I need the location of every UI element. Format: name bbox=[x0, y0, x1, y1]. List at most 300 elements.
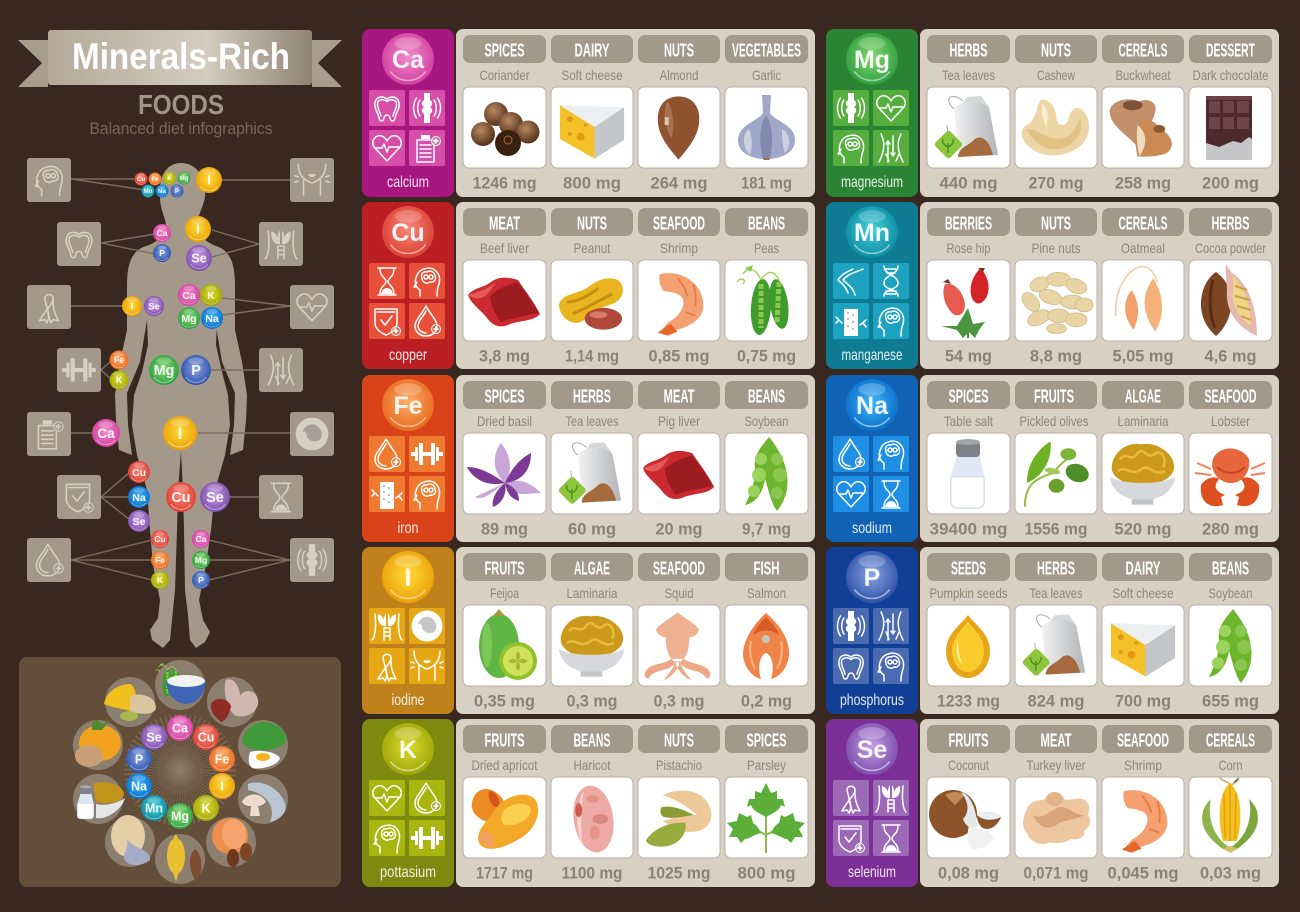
element spheres on body: Fe bbox=[114, 355, 124, 365]
element spheres on body: Ca bbox=[97, 426, 115, 441]
element ball Se bbox=[846, 723, 898, 775]
cell: Tea leaves: HERBS bbox=[950, 40, 988, 60]
cell: Pine nuts: NUTS bbox=[1041, 214, 1071, 234]
cell: Soybean: BEANS bbox=[1212, 558, 1249, 578]
card: manganese foods bbox=[920, 202, 1279, 369]
wheel element spheres: Se bbox=[146, 730, 162, 744]
icons bbox=[369, 608, 445, 684]
cell: Peas: 0,75 mg bbox=[737, 346, 796, 366]
cell: Oatmeal: CEREALS bbox=[1118, 214, 1168, 234]
element ball Cu bbox=[382, 206, 434, 258]
icons bbox=[369, 263, 445, 339]
cell: Oatmeal: Oatmeal bbox=[1121, 240, 1165, 256]
cell: Pumpkin seeds: SEEDS bbox=[951, 558, 986, 578]
panel: selenium bbox=[826, 719, 918, 887]
heading: FOODS: FOODS bbox=[138, 89, 224, 120]
cell: Pine nuts: Pine nuts bbox=[1032, 240, 1080, 256]
cell: Corn: 0,03 mg bbox=[1200, 864, 1261, 882]
element spheres on body: Fe bbox=[151, 176, 159, 183]
cell: Soybean: Soybean bbox=[1208, 585, 1252, 601]
panel: phosphorus bbox=[826, 547, 918, 714]
panel: manganese bbox=[826, 202, 918, 369]
cell: Cocoa powder: 4,6 mg bbox=[1204, 346, 1256, 366]
cell: Tea leaves: HERBS bbox=[1037, 558, 1075, 578]
element spheres on body: Fe bbox=[155, 555, 165, 565]
cell: Peanut bbox=[551, 208, 633, 366]
icons bbox=[833, 90, 909, 166]
name: selenium bbox=[848, 864, 896, 881]
connector lines bbox=[71, 179, 290, 580]
ribbon right tail bbox=[312, 40, 342, 87]
cell: Dried basil: 89 mg bbox=[481, 520, 528, 538]
element spheres on body: Ca bbox=[156, 228, 168, 238]
cell: Dark chocolate bbox=[1189, 35, 1272, 192]
cell: Shrimp: Shrimp bbox=[1124, 757, 1162, 773]
wheel background bbox=[19, 657, 341, 887]
cell: Haricot: BEANS bbox=[574, 730, 610, 750]
cell: Dried apricot: 1717 mg bbox=[476, 864, 533, 882]
icon tile: hourglass bbox=[259, 475, 303, 519]
icons bbox=[833, 608, 909, 684]
cell: Beef liver: MEAT bbox=[489, 214, 520, 234]
cell: Pine nuts bbox=[1015, 208, 1097, 366]
element spheres on body: I bbox=[207, 173, 211, 187]
icon tile: vessel bbox=[259, 348, 303, 392]
food circle: wheat and almond bbox=[155, 834, 205, 884]
panel: calcium bbox=[362, 29, 454, 197]
subtitle: Balanced diet infographics bbox=[90, 119, 272, 138]
cell: Soft cheese bbox=[551, 35, 633, 192]
cell: Pickled olives: 1556 mg bbox=[1024, 520, 1088, 538]
cell: Soybean: 655 mg bbox=[1202, 692, 1259, 710]
cell: Soybean: Soybean bbox=[744, 413, 788, 429]
panel: iron bbox=[362, 375, 454, 542]
cell: Almond: Almond bbox=[660, 67, 698, 83]
cell: Feijoa: 0,35 mg bbox=[474, 692, 535, 710]
cell: Dark chocolate: 200 mg bbox=[1202, 174, 1259, 192]
name: iodine bbox=[392, 692, 425, 709]
cell: Laminaria: 0,3 mg bbox=[566, 692, 618, 710]
panel: potassium bbox=[362, 719, 454, 887]
element ball K: K bbox=[399, 736, 417, 764]
cell: Squid: Squid bbox=[664, 585, 694, 601]
food circle: salt and algae bbox=[73, 774, 125, 824]
cell: Haricot: 1100 mg bbox=[562, 864, 622, 882]
cell: Beef liver: Beef liver bbox=[480, 240, 529, 256]
cell: Turkey liver: MEAT bbox=[1040, 730, 1072, 750]
cell: Coriander bbox=[463, 35, 546, 192]
wheel centre burst bbox=[142, 732, 218, 808]
element spheres on body: Cu bbox=[171, 490, 191, 506]
element ball Na bbox=[846, 379, 898, 431]
cell: Rose hip: BERRIES bbox=[945, 214, 992, 234]
cell: Garlic: 181 mg bbox=[741, 174, 792, 192]
element spheres on body: Mg bbox=[179, 175, 189, 182]
wheel element spheres: K bbox=[201, 801, 211, 815]
food circle: pumpkin and nut bbox=[73, 720, 123, 770]
card: magnesium foods bbox=[920, 29, 1279, 197]
icons bbox=[833, 780, 909, 856]
cell: Haricot: Haricot bbox=[574, 757, 611, 773]
cell: Shrimp bbox=[1102, 725, 1184, 882]
cell: Tea leaves: Tea leaves bbox=[1030, 585, 1082, 601]
cell: Lobster bbox=[1189, 381, 1272, 538]
cell: Pickled olives: Pickled olives bbox=[1020, 413, 1088, 429]
element spheres on body: I bbox=[131, 301, 134, 312]
element ball I bbox=[382, 551, 434, 603]
cell: Feijoa: FRUITS bbox=[484, 558, 524, 578]
wheel element spheres: P bbox=[135, 752, 143, 766]
cell: Pumpkin seeds: Pumpkin seeds bbox=[930, 585, 1008, 601]
element spheres on body: P bbox=[159, 248, 165, 258]
element spheres on body: Cu bbox=[132, 467, 146, 479]
cell: Coconut: Coconut bbox=[948, 757, 989, 773]
cell: Pickled olives bbox=[1015, 381, 1097, 538]
cell: Cashew: Cashew bbox=[1037, 67, 1076, 83]
cell: Almond: 264 mg bbox=[650, 174, 708, 192]
cell: Beef liver: 3,8 mg bbox=[479, 346, 530, 366]
cell: Parsley bbox=[725, 725, 808, 882]
panel: copper bbox=[362, 202, 454, 369]
body silhouette diagram bbox=[27, 158, 334, 648]
element spheres on body: P bbox=[175, 188, 179, 195]
cell: Dried apricot: Dried apricot bbox=[472, 757, 538, 773]
element spheres on body: P bbox=[198, 575, 204, 585]
cell: Soft cheese: 700 mg bbox=[1115, 692, 1171, 710]
cell: Lobster: 280 mg bbox=[1202, 520, 1259, 538]
name: phosphorus bbox=[840, 692, 904, 709]
card: phosphorus foods bbox=[920, 547, 1279, 714]
cell: Pistachio: 1025 mg bbox=[648, 864, 710, 882]
cell: Rose hip: 54 mg bbox=[945, 346, 992, 366]
name: iron bbox=[398, 520, 418, 537]
cell: Shrimp: SEAFOOD bbox=[1117, 730, 1169, 750]
element spheres on body: Se bbox=[191, 251, 207, 265]
wheel element spheres bbox=[126, 715, 235, 829]
cell: Cashew: NUTS bbox=[1041, 40, 1071, 60]
cell: Buckwheat: 258 mg bbox=[1115, 174, 1171, 192]
food circle: spinach and egg bbox=[238, 720, 288, 770]
icon tile: joint bbox=[290, 538, 334, 582]
cell: Dark chocolate: Dark chocolate bbox=[1192, 67, 1269, 83]
cell: Peas: Peas bbox=[754, 240, 779, 256]
wheel element spheres: Mn bbox=[145, 801, 163, 815]
cell: Turkey liver: 0,071 mg bbox=[1024, 864, 1088, 882]
cell: Pig liver bbox=[638, 381, 720, 538]
cell: Garlic: Garlic bbox=[752, 67, 781, 83]
title block bbox=[18, 30, 342, 138]
cell: Garlic: VEGETABLES bbox=[732, 40, 801, 60]
cell: Almond bbox=[638, 35, 720, 192]
name: copper bbox=[389, 347, 428, 364]
card: iron foods bbox=[456, 375, 815, 542]
cell: Turkey liver: Turkey liver bbox=[1026, 757, 1086, 773]
cell: Pine nuts: 8,8 mg bbox=[1030, 346, 1082, 366]
panel: iodine bbox=[362, 547, 454, 714]
cell: Tea leaves bbox=[551, 381, 633, 538]
element ball Cu: Cu bbox=[391, 219, 425, 247]
element ball Fe bbox=[382, 379, 434, 431]
element ball Na: Na bbox=[856, 392, 889, 420]
cell: Coriander: Coriander bbox=[480, 67, 530, 83]
cell: Soybean bbox=[1189, 553, 1272, 710]
icons bbox=[369, 90, 445, 166]
cell: Pumpkin seeds bbox=[927, 553, 1010, 710]
card: selenium foods bbox=[920, 719, 1279, 887]
food circle: fish and mushroom bbox=[238, 774, 288, 824]
cell: Oatmeal bbox=[1102, 208, 1184, 366]
cell: Garlic bbox=[725, 35, 808, 192]
cell: Cashew: 270 mg bbox=[1028, 174, 1084, 192]
cell: Corn bbox=[1189, 725, 1272, 882]
cell: Tea leaves: 440 mg bbox=[940, 174, 998, 192]
cell: Tea leaves: Tea leaves bbox=[942, 67, 995, 83]
cell: Soft cheese: 800 mg bbox=[563, 174, 621, 192]
wheel element spheres: Cu bbox=[198, 730, 214, 744]
cell: Parsley: Parsley bbox=[747, 757, 786, 773]
cell: Peas: BEANS bbox=[748, 214, 785, 234]
icon tile: brain bbox=[27, 158, 71, 202]
cell: Soft cheese: DAIRY bbox=[1126, 558, 1160, 578]
element ball Se: Se bbox=[857, 736, 887, 764]
element ball I: I bbox=[405, 564, 411, 592]
ribbon banner bbox=[48, 30, 312, 85]
cell: Salmon: FISH bbox=[754, 558, 780, 578]
cell: Tea leaves: HERBS bbox=[573, 386, 611, 406]
cell: Tea leaves bbox=[927, 35, 1010, 192]
cell: Pumpkin seeds: 1233 mg bbox=[937, 692, 1000, 710]
card: calcium foods bbox=[456, 29, 815, 197]
element spheres on body: I bbox=[178, 425, 182, 443]
element ball P bbox=[846, 551, 898, 603]
element spheres on body: Ca bbox=[182, 290, 196, 302]
cell: Feijoa bbox=[463, 553, 546, 710]
cell: Buckwheat bbox=[1102, 35, 1184, 192]
cell: Salmon: 0,2 mg bbox=[741, 692, 792, 710]
cell: Salmon bbox=[725, 553, 808, 710]
element spheres on body: K bbox=[207, 290, 215, 302]
cell: Parsley: SPICES bbox=[746, 730, 786, 750]
cell: Tea leaves: 824 mg bbox=[1028, 692, 1084, 710]
food circle: peach and coffee bbox=[206, 817, 256, 867]
element spheres on body: Na bbox=[132, 492, 146, 504]
card: sodium foods bbox=[920, 375, 1279, 542]
element spheres on body: I bbox=[196, 222, 200, 236]
element ball Ca bbox=[382, 33, 434, 85]
body silhouette bbox=[115, 163, 247, 648]
element spheres on body: Cu bbox=[154, 534, 166, 544]
cell: Cocoa powder: HERBS bbox=[1212, 214, 1250, 234]
icon tile: thyroid bbox=[259, 222, 303, 266]
cell: Parsley: 800 mg bbox=[738, 864, 796, 882]
cell: Dried apricot bbox=[463, 725, 546, 882]
cell: Lobster: SEAFOOD bbox=[1204, 386, 1256, 406]
food circle: cheese and pistachio bbox=[104, 677, 156, 727]
cell: Cashew bbox=[1015, 35, 1097, 192]
element spheres on body: Mn bbox=[143, 188, 153, 195]
icon tile: fetus bbox=[290, 412, 334, 456]
cell: Tea leaves bbox=[1015, 553, 1097, 710]
element spheres on body: Ca bbox=[195, 534, 207, 544]
cell: Pickled olives: FRUITS bbox=[1034, 386, 1074, 406]
cell: Laminaria: Laminaria bbox=[1118, 413, 1169, 429]
cell: Peanut: Peanut bbox=[574, 240, 611, 256]
element spheres on body: Na bbox=[205, 313, 219, 325]
cell: Rose hip bbox=[927, 208, 1010, 366]
cell: Soft cheese: Soft cheese bbox=[1112, 585, 1174, 601]
element ball Mg bbox=[846, 33, 898, 85]
cell: Pistachio bbox=[638, 725, 720, 882]
cell: Table salt: 39400 mg bbox=[930, 520, 1008, 538]
element spheres on body: K bbox=[167, 175, 172, 182]
icon tile: battery bbox=[27, 412, 71, 456]
cell: Laminaria bbox=[551, 553, 633, 710]
wheel element spheres: Ca bbox=[172, 721, 189, 735]
element spheres on body: Se bbox=[148, 301, 160, 312]
cell: Laminaria: 520 mg bbox=[1114, 520, 1172, 538]
panel: food wheel bbox=[19, 657, 341, 887]
name: manganese bbox=[842, 347, 903, 364]
cell: Laminaria: Laminaria bbox=[566, 585, 618, 601]
cell: Oatmeal: 5,05 mg bbox=[1112, 346, 1174, 366]
name: sodium bbox=[852, 520, 892, 537]
cell: Pig liver: Pig liver bbox=[658, 413, 700, 429]
icon tile: ribbon bbox=[27, 285, 71, 329]
element spheres on body: Se bbox=[133, 516, 146, 528]
cell: Peanut: NUTS bbox=[577, 214, 607, 234]
cell: Soft cheese bbox=[1102, 553, 1184, 710]
cell: Dried basil bbox=[463, 381, 546, 538]
panel: magnesium bbox=[826, 29, 918, 197]
cell: Soybean bbox=[725, 381, 808, 538]
element spheres on body: Se bbox=[206, 490, 224, 506]
cell: Coconut bbox=[927, 725, 1010, 882]
cell: Corn: CEREALS bbox=[1206, 730, 1255, 750]
element spheres on body: Mg bbox=[195, 555, 207, 565]
icon tile: tooth bbox=[57, 222, 101, 266]
icon tile: drop bbox=[27, 538, 71, 582]
wheel element spheres: Mg bbox=[171, 809, 189, 823]
cell: Squid: 0,3 mg bbox=[654, 692, 704, 710]
cell: Laminaria: ALGAE bbox=[574, 558, 610, 578]
cell: Pig liver: MEAT bbox=[664, 386, 694, 406]
cell: Buckwheat: CEREALS bbox=[1118, 40, 1168, 60]
cell: Shrimp: SEAFOOD bbox=[653, 214, 705, 234]
cell: Shrimp: Shrimp bbox=[660, 240, 698, 256]
element spheres on body: Mg bbox=[154, 363, 174, 379]
cell: Dried basil: SPICES bbox=[484, 386, 524, 406]
cell: Cocoa powder bbox=[1189, 208, 1272, 366]
cell: Dark chocolate: DESSERT bbox=[1206, 40, 1255, 60]
cell: Peas bbox=[725, 208, 808, 366]
cell: Pistachio: NUTS bbox=[664, 730, 694, 750]
cell: Laminaria bbox=[1102, 381, 1184, 538]
element ball Mg: Mg bbox=[854, 46, 890, 74]
icon tile: dumbbell bbox=[57, 348, 101, 392]
element spheres on body: K bbox=[157, 575, 164, 585]
cell: Soybean: 9,7 mg bbox=[742, 520, 791, 538]
cell: Beef liver bbox=[463, 208, 546, 366]
name: magnesium bbox=[841, 174, 903, 191]
cell: Coconut: 0,08 mg bbox=[938, 864, 999, 882]
cell: Tea leaves: Tea leaves bbox=[566, 413, 618, 429]
food circle: peas and rice bbox=[155, 660, 206, 710]
cell: Table salt: SPICES bbox=[948, 386, 988, 406]
element ball Fe: Fe bbox=[393, 392, 423, 420]
cell: Almond: NUTS bbox=[664, 40, 694, 60]
wheel element spheres: Fe bbox=[215, 752, 229, 766]
cell: Shrimp: 0,045 mg bbox=[1108, 864, 1178, 882]
element spheres on body: P bbox=[191, 363, 201, 379]
cell: Laminaria: ALGAE bbox=[1125, 386, 1161, 406]
cell: Lobster: Lobster bbox=[1211, 413, 1250, 429]
title: Minerals-Rich: Minerals-Rich bbox=[72, 36, 290, 77]
cell: Corn: Corn bbox=[1218, 757, 1242, 773]
cell: Salmon: Salmon bbox=[747, 585, 786, 601]
cell: Coriander: SPICES bbox=[484, 40, 524, 60]
cell: Shrimp bbox=[638, 208, 720, 366]
cell: Turkey liver bbox=[1015, 725, 1097, 882]
cell: Shrimp: 0,85 mg bbox=[648, 346, 710, 366]
icons bbox=[369, 436, 445, 512]
icon tile: neck bbox=[290, 158, 334, 202]
cell: Squid: SEAFOOD bbox=[653, 558, 705, 578]
cell: Peanut: 1,14 mg bbox=[565, 346, 619, 366]
cell: Pig liver: 20 mg bbox=[656, 520, 702, 538]
cell: Pistachio: Pistachio bbox=[656, 757, 702, 773]
cell: Squid bbox=[638, 553, 720, 710]
icons bbox=[833, 263, 909, 339]
panel: sodium bbox=[826, 375, 918, 542]
cell: Dried apricot: FRUITS bbox=[484, 730, 524, 750]
cell: Soft cheese: DAIRY bbox=[574, 40, 610, 60]
wheel element spheres: Na bbox=[131, 779, 148, 793]
cell: Feijoa: Feijoa bbox=[490, 585, 519, 601]
element spheres on body: K bbox=[116, 375, 123, 385]
element ball P: P bbox=[864, 564, 880, 592]
element spheres on body: Mg bbox=[181, 313, 197, 325]
element spheres on body: Na bbox=[158, 188, 167, 195]
name: calcium bbox=[387, 174, 429, 191]
cell: Table salt: Table salt bbox=[944, 413, 993, 429]
cell: Haricot bbox=[551, 725, 633, 882]
element spheres on body: Cu bbox=[137, 176, 145, 183]
element ball Mn: Mn bbox=[854, 219, 890, 247]
cell: Soybean: BEANS bbox=[748, 386, 785, 406]
ribbon left tail bbox=[18, 40, 48, 87]
icon tile: heart bbox=[290, 285, 334, 329]
cell: Dried basil: Dried basil bbox=[477, 413, 532, 429]
cell: Rose hip: Rose hip bbox=[946, 240, 991, 256]
cell: Buckwheat: Buckwheat bbox=[1116, 67, 1171, 83]
cell: Tea leaves: 60 mg bbox=[568, 520, 616, 538]
element ball K bbox=[382, 723, 434, 775]
cell: Coriander: 1246 mg bbox=[472, 174, 536, 192]
card: potassium foods bbox=[456, 719, 815, 887]
element ball Mn bbox=[846, 206, 898, 258]
cell: Soft cheese: Soft cheese bbox=[562, 67, 623, 83]
icons bbox=[369, 780, 445, 856]
element ball Ca: Ca bbox=[392, 46, 425, 74]
cell: Coconut: FRUITS bbox=[948, 730, 988, 750]
food circle: oat and garlic bbox=[105, 815, 155, 867]
card: iodine foods bbox=[456, 547, 815, 714]
cell: Cocoa powder: Cocoa powder bbox=[1195, 240, 1266, 256]
card: copper foods bbox=[456, 202, 815, 369]
element spheres on body bbox=[92, 167, 230, 589]
food circle: hazelnut and sausage bbox=[207, 677, 258, 727]
cell: Table salt bbox=[927, 381, 1010, 538]
